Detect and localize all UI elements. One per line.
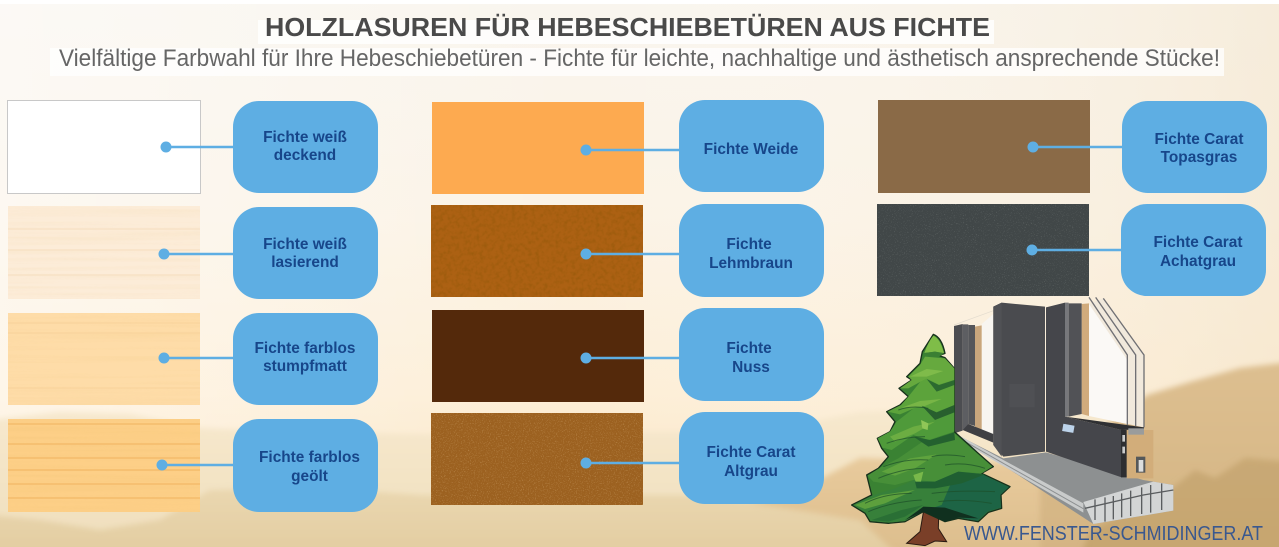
- centre column: [993, 303, 1045, 457]
- top tier: [924, 336, 944, 353]
- label: Fichte weiß lasierend: [233, 207, 378, 299]
- badge: [1062, 424, 1075, 433]
- left frame: [954, 324, 963, 433]
- swatch: Fichte farblos stumpfmatt: [8, 313, 233, 405]
- swatch group: column 3: [877, 100, 1122, 296]
- label pills: column 2: [679, 100, 824, 504]
- swatch: Fichte Nuss: [432, 310, 679, 402]
- swatch: Fichte Weide: [432, 102, 679, 194]
- swatch: Fichte weiß lasierend: [8, 206, 233, 299]
- left glass: [982, 314, 993, 435]
- label: Fichte farblos stumpfmatt: Fichte farblos: [255, 340, 355, 357]
- label: Fichte weiß deckend: deckend: [274, 147, 336, 164]
- label: Fichte Carat Topasgras: Topasgras: [1161, 149, 1237, 166]
- bottom left tier: [853, 477, 952, 523]
- illustration: lift-and-slide door cross-section: [954, 297, 1173, 524]
- lower right dark tier: [932, 472, 1009, 521]
- swatch: Fichte Carat Topasgras: [878, 100, 1122, 193]
- swatch group: column 2: [431, 102, 679, 505]
- swatch: Fichte farblos geölt: [8, 419, 233, 512]
- foliage silhouette: [852, 334, 1010, 523]
- third tier: [888, 377, 954, 414]
- label: Fichte weiß deckend: Fichte weiß: [263, 129, 347, 146]
- label: Fichte Weide: Fichte Weide: [704, 141, 799, 158]
- under-shadow of tree: [905, 507, 978, 522]
- right glass: [1089, 298, 1144, 427]
- label: Fichte Nuss: Fichte: [726, 340, 772, 357]
- wood core and seals: [1127, 430, 1153, 478]
- sill floor: [954, 433, 1173, 524]
- label: Fichte Carat Achatgrau: Achatgrau: [1160, 253, 1236, 270]
- label: Fichte Lehmbraun: [679, 204, 824, 297]
- swatch: Fichte Lehmbraun: [431, 205, 679, 297]
- label: Fichte Weide: [679, 100, 824, 192]
- swatch: Fichte weiß deckend: [8, 100, 233, 194]
- swatch: Fichte Carat Achatgrau: [877, 204, 1121, 296]
- label: Fichte weiß lasierend: Fichte weiß: [263, 236, 347, 253]
- label: Fichte Carat Achatgrau: Fichte Carat: [1154, 234, 1242, 251]
- label: Fichte Nuss: [679, 308, 824, 401]
- label: Fichte Lehmbraun: Fichte: [726, 236, 772, 253]
- label: Fichte farblos geölt: geölt: [291, 468, 328, 485]
- label: Fichte farblos stumpfmatt: stumpfmatt: [263, 358, 347, 375]
- label: Fichte Carat Altgrau: Altgrau: [724, 463, 778, 480]
- title: HOLZLASUREN FÜR HEBESCHIEBETÜREN AUS FICHTE: [265, 12, 990, 42]
- swatch group: column 1: [8, 100, 233, 512]
- right sash: [1046, 303, 1122, 477]
- label pills: column 1: [233, 101, 378, 512]
- label: Fichte Carat Topasgras: Fichte Carat: [1155, 131, 1243, 148]
- label: Fichte Lehmbraun: Lehmbraun: [709, 255, 793, 272]
- needle strokes: [865, 407, 995, 512]
- illustration: spruce tree: [852, 334, 1010, 546]
- label pills: column 3: [1121, 101, 1267, 296]
- label: Fichte Carat Altgrau: [679, 412, 824, 504]
- subtitle: Vielfältige Farbwahl für Ihre Hebeschiebetüren - Fichte für leichte, nachhaltige und ästhetisch ansprechende Stücke!: [59, 45, 1220, 72]
- fourth tier: [878, 403, 954, 450]
- second tier: [900, 357, 954, 388]
- label: Fichte Carat Topasgras: [1122, 101, 1267, 193]
- label: Fichte farblos stumpfmatt: [233, 313, 378, 405]
- fifth tier: [868, 433, 992, 485]
- label: Fichte weiß lasierend: lasierend: [271, 254, 339, 271]
- label: Fichte Carat Altgrau: Fichte Carat: [707, 444, 795, 461]
- label: Fichte farblos geölt: [233, 419, 378, 512]
- swatch: Fichte Carat Altgrau: [431, 413, 679, 505]
- label: Fichte farblos geölt: Fichte farblos: [259, 449, 360, 466]
- label: Fichte Nuss: Nuss: [732, 359, 770, 376]
- label: Fichte Carat Achatgrau: [1121, 204, 1266, 296]
- trunk: [907, 507, 947, 546]
- label: Fichte weiß deckend: [233, 101, 378, 193]
